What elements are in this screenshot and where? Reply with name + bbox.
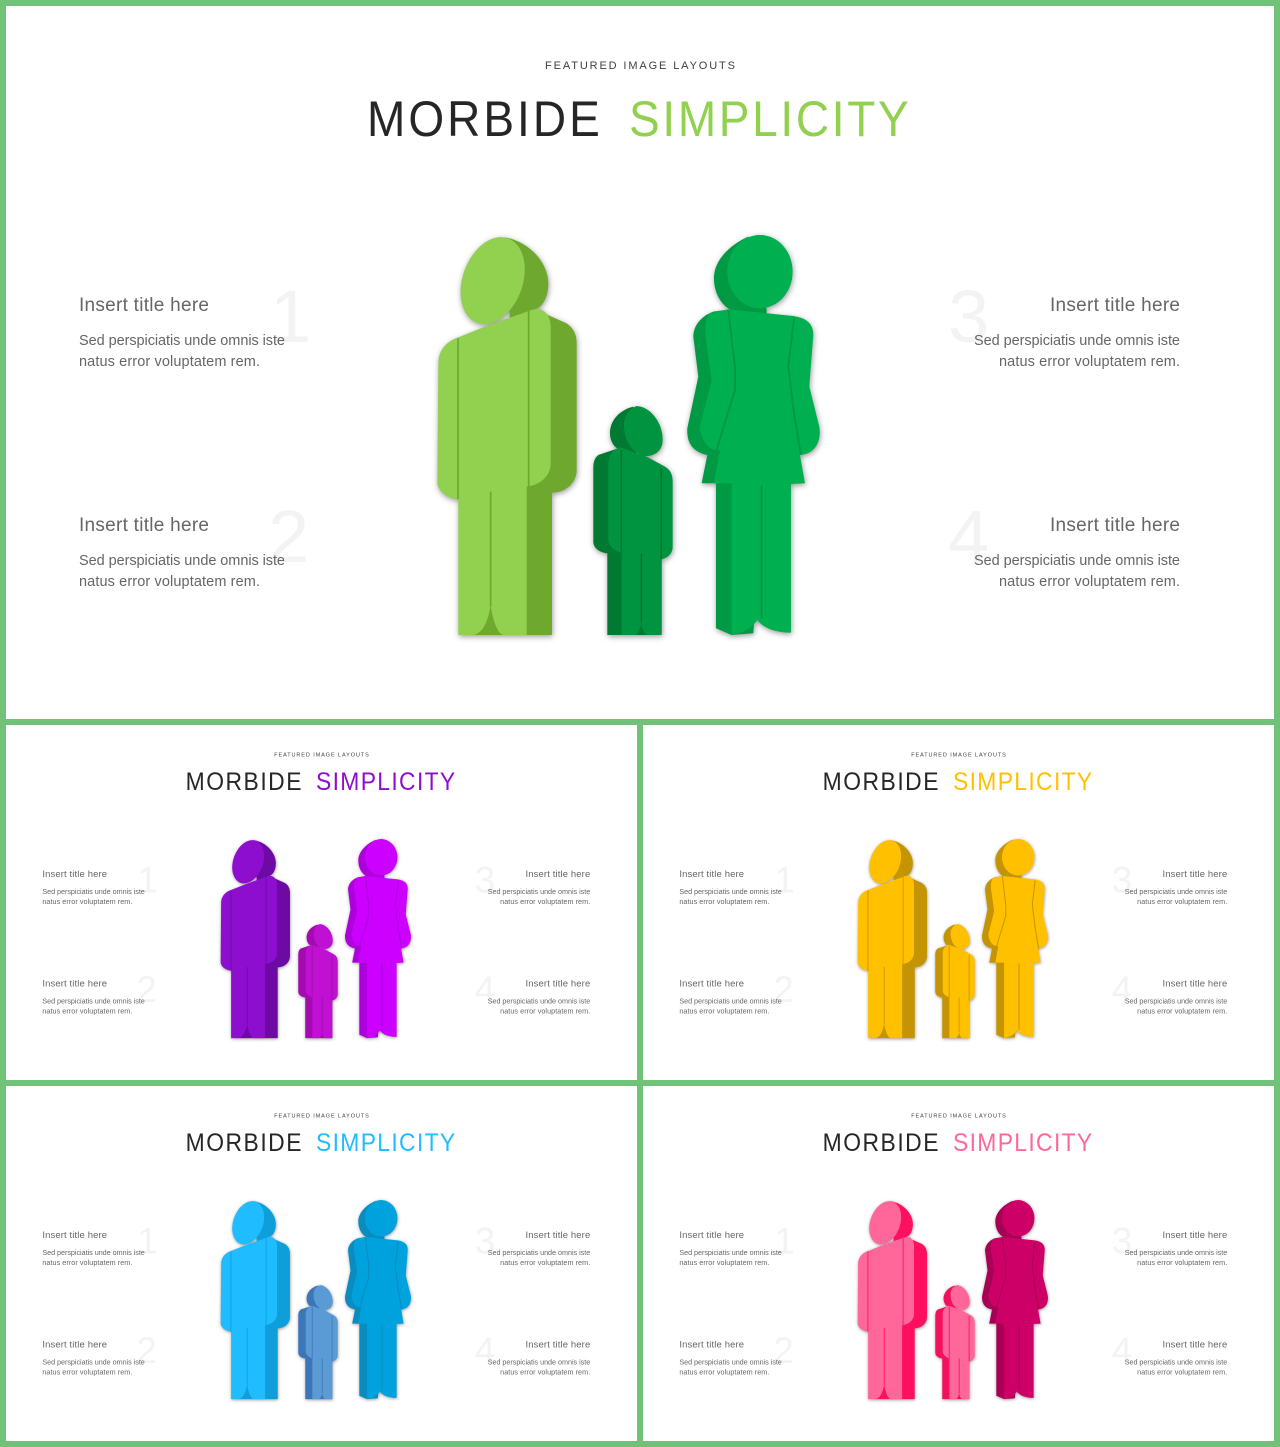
text block 3: Insert title here xyxy=(1163,1230,1227,1241)
figure: child xyxy=(298,924,338,1038)
text block 1: Sed perspiciatis unde omnis iste xyxy=(679,1248,782,1257)
text block 4 xyxy=(948,495,1180,590)
text block 3: natus error voluptatem rem. xyxy=(1137,897,1227,906)
text block 2 xyxy=(679,969,794,1016)
title: SIMPLICITY xyxy=(953,1129,1092,1157)
text block 3: Insert title here xyxy=(1050,295,1180,316)
title xyxy=(367,92,909,147)
title: SIMPLICITY xyxy=(629,92,909,147)
text block 1: Sed perspiciatis unde omnis iste xyxy=(42,887,145,896)
text block 1 xyxy=(679,1220,795,1267)
eyebrow label: FEATURED IMAGE LAYOUTS xyxy=(545,60,735,72)
title: MORBIDE xyxy=(367,92,600,147)
text block 4: 4 xyxy=(1112,1330,1132,1371)
text block 4: Sed perspiciatis unde omnis iste xyxy=(488,996,590,1005)
text block 2 xyxy=(42,969,157,1016)
family figures xyxy=(221,1197,411,1399)
figure: woman xyxy=(345,1200,411,1399)
title: SIMPLICITY xyxy=(316,768,455,796)
eyebrow label: FEATURED IMAGE LAYOUTS xyxy=(274,1113,369,1119)
text block 2: natus error voluptatem rem. xyxy=(42,1007,132,1016)
text block 3: natus error voluptatem rem. xyxy=(500,1258,590,1267)
panel: pink slide xyxy=(643,1086,1274,1441)
text block 3: 3 xyxy=(948,275,989,358)
text block 3 xyxy=(475,1220,590,1267)
text block 2: 2 xyxy=(268,495,309,578)
text block 1: 1 xyxy=(774,1220,795,1261)
figure: man xyxy=(858,836,927,1038)
text block 1: natus error voluptatem rem. xyxy=(42,897,132,906)
text block 2 xyxy=(42,1330,157,1377)
text block 2 xyxy=(679,1330,794,1377)
text block 1: natus error voluptatem rem. xyxy=(42,1258,132,1267)
text block 2 xyxy=(79,495,309,590)
text block 1: Sed perspiciatis unde omnis iste xyxy=(42,1248,145,1257)
text block 3 xyxy=(475,859,590,906)
text block 2: 2 xyxy=(773,969,794,1010)
text block 1: Sed perspiciatis unde omnis iste xyxy=(679,887,782,896)
text block 4 xyxy=(1112,969,1227,1016)
panel: gold slide xyxy=(643,725,1274,1080)
text block 3 xyxy=(1112,859,1227,906)
text block 4: natus error voluptatem rem. xyxy=(1137,1368,1227,1377)
text block 1: Insert title here xyxy=(42,869,107,880)
text block 1: natus error voluptatem rem. xyxy=(79,354,260,370)
eyebrow label: FEATURED IMAGE LAYOUTS xyxy=(911,1113,1006,1119)
text block 1: 1 xyxy=(137,859,158,900)
text block 1: natus error voluptatem rem. xyxy=(679,1258,769,1267)
text block 4: 4 xyxy=(475,969,495,1010)
text block 3: Insert title here xyxy=(526,1230,590,1241)
figure: man xyxy=(437,228,577,635)
text block 4: Insert title here xyxy=(526,978,590,989)
text block 4: Insert title here xyxy=(526,1339,590,1350)
text block 2: Insert title here xyxy=(42,1339,107,1350)
text block 1: Sed perspiciatis unde omnis iste xyxy=(79,333,285,349)
text block 3 xyxy=(1112,1220,1227,1267)
eyebrow label: FEATURED IMAGE LAYOUTS xyxy=(274,752,369,758)
title: MORBIDE xyxy=(186,1129,301,1157)
text block 2: natus error voluptatem rem. xyxy=(42,1368,132,1377)
text block 2: Insert title here xyxy=(42,978,107,989)
text block 1 xyxy=(679,859,795,906)
text block 2: Sed perspiciatis unde omnis iste xyxy=(679,1357,782,1366)
text block 4: natus error voluptatem rem. xyxy=(1137,1007,1227,1016)
text block 4 xyxy=(1112,1330,1227,1377)
title xyxy=(186,1129,455,1157)
text block 3: natus error voluptatem rem. xyxy=(500,897,590,906)
figure: child xyxy=(935,1285,975,1399)
text block 2: Insert title here xyxy=(679,1339,744,1350)
text block 3: natus error voluptatem rem. xyxy=(999,354,1180,370)
text block 2: Sed perspiciatis unde omnis iste xyxy=(42,1357,145,1366)
text block 3: Sed perspiciatis unde omnis iste xyxy=(974,333,1180,349)
figure: child xyxy=(935,924,975,1038)
figure: man xyxy=(221,1197,290,1399)
text block 4: 4 xyxy=(948,495,989,578)
text block 2: natus error voluptatem rem. xyxy=(679,1007,769,1016)
family figures xyxy=(858,1197,1048,1399)
title xyxy=(823,1129,1092,1157)
title xyxy=(823,768,1092,796)
figure: woman xyxy=(687,235,820,635)
text block 2: Sed perspiciatis unde omnis iste xyxy=(42,996,145,1005)
text block 1: Insert title here xyxy=(679,1230,744,1241)
text block 3: natus error voluptatem rem. xyxy=(1137,1258,1227,1267)
text block 4: Sed perspiciatis unde omnis iste xyxy=(488,1357,590,1366)
text block 3: Insert title here xyxy=(526,869,590,880)
text block 4: Sed perspiciatis unde omnis iste xyxy=(1125,996,1227,1005)
text block 4: natus error voluptatem rem. xyxy=(500,1007,590,1016)
text block 2: Sed perspiciatis unde omnis iste xyxy=(79,553,285,569)
text block 3: 3 xyxy=(475,859,495,900)
text block 4: Insert title here xyxy=(1050,515,1180,536)
text block 1: 1 xyxy=(137,1220,158,1261)
text block 4: Sed perspiciatis unde omnis iste xyxy=(974,553,1180,569)
text block 1 xyxy=(42,859,158,906)
title xyxy=(186,768,455,796)
text block 3 xyxy=(948,275,1180,370)
figure: child xyxy=(298,1285,338,1399)
text block 4: 4 xyxy=(1112,969,1132,1010)
family figures xyxy=(221,836,411,1038)
text block 1: Insert title here xyxy=(79,295,209,316)
panel: main green slide xyxy=(6,6,1274,719)
title: SIMPLICITY xyxy=(953,768,1092,796)
text block 4: Insert title here xyxy=(1163,978,1227,989)
text block 4: 4 xyxy=(475,1330,495,1371)
text block 3: 3 xyxy=(475,1220,495,1261)
text block 4: Insert title here xyxy=(1163,1339,1227,1350)
text block 4 xyxy=(475,1330,590,1377)
text block 2: natus error voluptatem rem. xyxy=(79,574,260,590)
text block 4: natus error voluptatem rem. xyxy=(999,574,1180,590)
text block 2: 2 xyxy=(773,1330,794,1371)
text block 1: Insert title here xyxy=(679,869,744,880)
text block 4 xyxy=(475,969,590,1016)
title: MORBIDE xyxy=(186,768,301,796)
text block 3: Sed perspiciatis unde omnis iste xyxy=(1125,887,1227,896)
text block 1: 1 xyxy=(774,859,795,900)
text block 1: natus error voluptatem rem. xyxy=(679,897,769,906)
family figures xyxy=(437,228,820,635)
title: MORBIDE xyxy=(823,1129,938,1157)
text block 1: Insert title here xyxy=(42,1230,107,1241)
text block 3: Sed perspiciatis unde omnis iste xyxy=(1125,1248,1227,1257)
text block 1 xyxy=(79,275,311,370)
text block 3: Sed perspiciatis unde omnis iste xyxy=(488,887,590,896)
figure: man xyxy=(858,1197,927,1399)
figure: man xyxy=(221,836,290,1038)
text block 2: 2 xyxy=(136,969,157,1010)
text block 2: Insert title here xyxy=(79,515,209,536)
text block 3: 3 xyxy=(1112,859,1132,900)
text block 3: 3 xyxy=(1112,1220,1132,1261)
text block 3: Sed perspiciatis unde omnis iste xyxy=(488,1248,590,1257)
title: SIMPLICITY xyxy=(316,1129,455,1157)
panel: blue slide xyxy=(6,1086,637,1441)
eyebrow label: FEATURED IMAGE LAYOUTS xyxy=(911,752,1006,758)
figure: child xyxy=(593,406,673,635)
text block 2: Sed perspiciatis unde omnis iste xyxy=(679,996,782,1005)
text block 2: Insert title here xyxy=(679,978,744,989)
text block 2: natus error voluptatem rem. xyxy=(679,1368,769,1377)
text block 1: 1 xyxy=(270,275,311,358)
text block 1 xyxy=(42,1220,158,1267)
panel: purple slide xyxy=(6,725,637,1080)
title: MORBIDE xyxy=(823,768,938,796)
family figures xyxy=(858,836,1048,1038)
text block 2: 2 xyxy=(136,1330,157,1371)
figure: woman xyxy=(345,839,411,1038)
text block 4: natus error voluptatem rem. xyxy=(500,1368,590,1377)
figure: woman xyxy=(982,839,1048,1038)
text block 4: Sed perspiciatis unde omnis iste xyxy=(1125,1357,1227,1366)
text block 3: Insert title here xyxy=(1163,869,1227,880)
figure: woman xyxy=(982,1200,1048,1399)
